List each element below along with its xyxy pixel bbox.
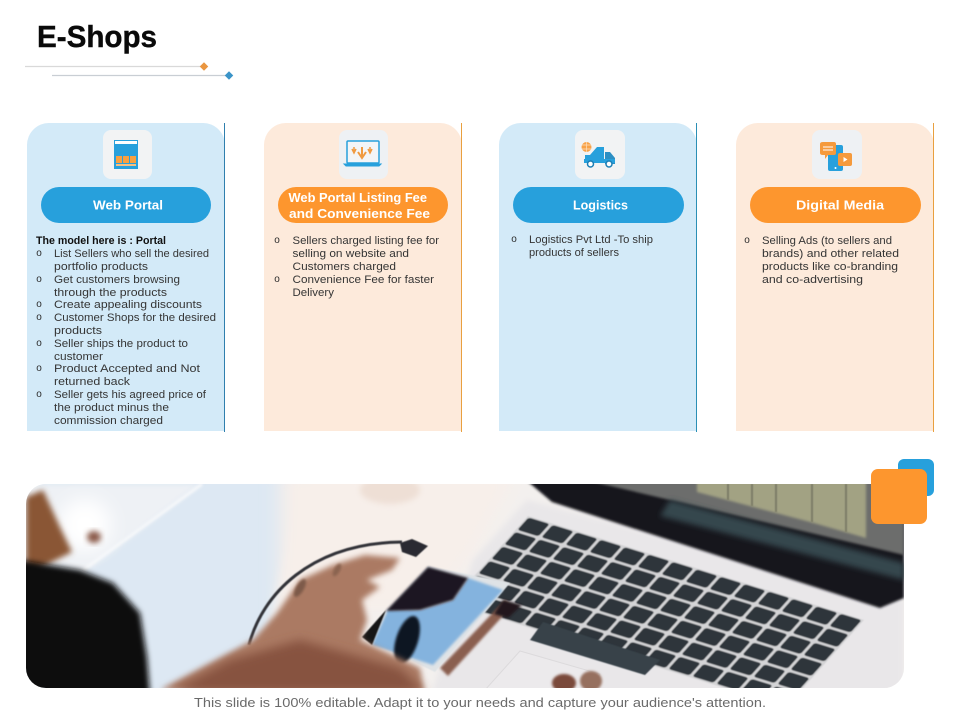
heading pill: logistics: Logistics <box>573 198 628 212</box>
icon: delivery truck <box>575 130 625 179</box>
panel: logistics <box>499 123 697 432</box>
title decoration: orange line <box>25 62 208 71</box>
text block: portal model: Seller gets his agreed price of <box>54 389 207 401</box>
hand <box>160 555 425 692</box>
title decoration: blue line <box>52 71 233 80</box>
text block: portal model <box>36 235 216 427</box>
text block: portal model: through the products <box>54 287 168 299</box>
heading pill: digital media: Digital Media <box>796 198 885 212</box>
text block: logistics <box>511 234 653 259</box>
text block: portal model: Create appealing discounts <box>54 299 203 311</box>
text block: logistics: products of sellers <box>529 247 620 259</box>
heading pill: logistics <box>513 187 684 223</box>
text block: digital media: and co-advertising <box>762 274 863 286</box>
footer note: This slide is 100% editable. Adapt it to your needs and capture your audience's attention. <box>194 696 766 710</box>
heading pill: listing fee <box>278 187 448 223</box>
text block: portal model: commission charged <box>54 415 163 427</box>
text block: digital media: products like co-branding <box>762 261 898 273</box>
text block: portal model: o <box>36 363 42 374</box>
text block: portal model: o <box>36 389 42 400</box>
text block: digital media: o <box>744 235 750 246</box>
heading pill: listing fee: and Convenience Fee <box>289 207 430 221</box>
text block: portal model: products <box>54 325 103 337</box>
text block: digital media <box>744 235 899 286</box>
text block: listing fee: o <box>274 274 280 285</box>
text block: portal model: returned back <box>54 376 131 388</box>
text block: portal model: Product Accepted and Not <box>54 363 200 375</box>
keyboard <box>475 516 864 688</box>
text block: portal model: portfolio products <box>54 261 149 273</box>
text block: portal model: The model here is : Portal <box>36 235 166 247</box>
icon: web page <box>103 130 152 179</box>
panel: digital media <box>736 123 934 432</box>
trackpad <box>485 651 600 690</box>
panel: listing fee <box>264 123 462 432</box>
heading pill: web portal: Web Portal <box>93 198 163 212</box>
text block: listing fee: Convenience Fee for faster <box>292 274 434 286</box>
text block: portal model: o <box>36 274 42 285</box>
text block: portal model: Customer Shops for the desired <box>54 312 216 324</box>
text block: logistics: Logistics Pvt Ltd -To ship <box>529 234 653 246</box>
photo: hand on phone beside laptop <box>26 484 904 688</box>
heading pill: digital media <box>750 187 921 223</box>
text block: listing fee: Delivery <box>292 287 335 299</box>
text block: listing fee: selling on website and <box>292 248 409 260</box>
text block: portal model: o <box>36 299 42 310</box>
text block: listing fee: Customers charged <box>292 261 396 273</box>
text block: portal model: o <box>36 248 42 259</box>
pale blue desk <box>39 484 284 688</box>
text block: listing fee: Sellers charged listing fee for <box>292 235 439 247</box>
phone <box>362 566 522 676</box>
title: E-Shops <box>37 19 157 54</box>
text block: portal model: the product minus the <box>54 402 169 414</box>
icon: phone with chat <box>812 130 862 179</box>
accent square: blue <box>898 459 934 496</box>
laptop deck <box>430 500 904 700</box>
text block: digital media: Selling Ads (to sellers and <box>762 235 892 247</box>
text block: portal model: Get customers browsing <box>54 274 180 286</box>
panel: web portal <box>27 123 225 432</box>
text block: portal model: List Sellers who sell the desired <box>54 248 209 260</box>
accent square: orange <box>871 469 927 524</box>
heading pill: listing fee: Web Portal Listing Fee <box>288 191 427 205</box>
text block: listing fee <box>274 235 439 299</box>
spreadsheet on screen <box>697 480 866 538</box>
text block: portal model: customer <box>54 351 103 363</box>
text block: portal model: o <box>36 312 42 323</box>
text block: digital media: brands) and other related <box>762 248 899 260</box>
head silhouette <box>20 560 150 695</box>
text block: logistics: o <box>511 234 517 245</box>
text block: portal model: o <box>36 338 42 349</box>
text block: listing fee: o <box>274 235 280 246</box>
text block: portal model: Seller ships the product to <box>54 338 188 350</box>
cable <box>249 542 402 645</box>
icon: laptop with arrows <box>339 130 388 179</box>
heading pill: web portal <box>41 187 211 223</box>
